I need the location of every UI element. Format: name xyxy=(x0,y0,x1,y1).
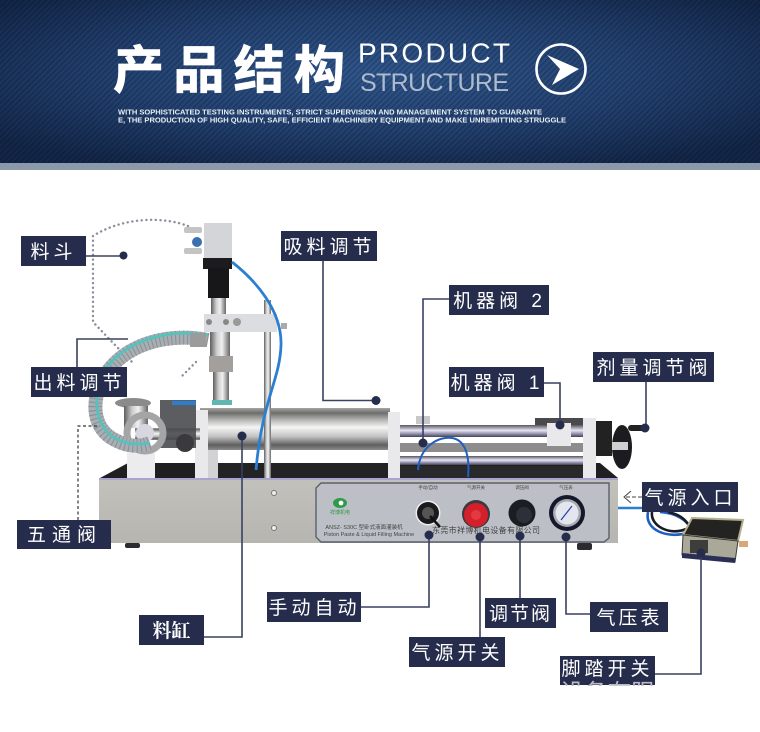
label: 五通阀 xyxy=(17,520,111,549)
label: 料斗: 料斗 xyxy=(30,241,77,263)
hand wheel xyxy=(596,421,648,469)
leader: hopper xyxy=(86,252,128,260)
front block xyxy=(127,453,155,478)
blue loop xyxy=(418,438,468,477)
regulator knob xyxy=(508,500,536,526)
stainless base xyxy=(99,478,618,543)
title: STRUCTURE: STRUCTURE xyxy=(360,69,509,97)
label: 气源入口 xyxy=(642,482,738,512)
blue air tube xyxy=(232,262,281,470)
leader: machine valve 2 xyxy=(418,299,449,448)
knob captions: 调压阀 xyxy=(515,484,529,491)
machine xyxy=(95,223,648,550)
upright blocks xyxy=(195,410,596,478)
knob captions xyxy=(418,484,573,491)
header banner xyxy=(0,0,760,170)
leader: air switch xyxy=(476,532,484,637)
leader: machine valve 1 xyxy=(544,383,564,430)
label: 机器阀 1 xyxy=(449,367,544,397)
label: 手动自动 xyxy=(267,592,361,622)
leader: regulator xyxy=(516,532,524,598)
pressure gauge xyxy=(549,495,585,531)
label: 出料调节: 出料调节 xyxy=(33,372,126,394)
label: 剂量调节阀: 剂量调节阀 xyxy=(596,357,712,379)
label: 气压表: 气压表 xyxy=(596,607,663,629)
black deck xyxy=(100,463,618,478)
tagline xyxy=(118,108,566,124)
logo: 祥博机电 xyxy=(330,509,350,516)
leader: suction adjust xyxy=(323,261,380,405)
control panel xyxy=(316,483,609,542)
main cylinder xyxy=(200,408,390,450)
air hose to base xyxy=(618,507,642,509)
leader: material cylinder xyxy=(204,432,246,637)
leader: five-way valve xyxy=(78,426,97,520)
label: 出料调节 xyxy=(31,367,127,397)
title: Chinese: 产品结构 xyxy=(113,42,345,99)
coiled cables xyxy=(648,512,690,535)
tagline: E, THE PRODUCTION OF HIGH QUALITY, SAFE, EFFICIENT MACHINERY EQUIPMENT AND MAKE UNREMITTING STRUGGLE xyxy=(118,116,566,124)
leader: dose valve xyxy=(640,382,650,432)
leader: discharge adjust xyxy=(77,339,128,367)
label: 气源开关 xyxy=(409,637,505,667)
label: 气源开关: 气源开关 xyxy=(411,642,504,664)
pole xyxy=(264,300,271,478)
logo xyxy=(330,498,350,516)
emergency button xyxy=(462,500,490,528)
label: 机器阀 2: 机器阀 2 xyxy=(453,290,546,312)
arrow: air inlet xyxy=(624,491,642,503)
label: 机器阀 2 xyxy=(449,285,549,315)
vertical cylinder assembly xyxy=(184,223,287,405)
label: 手动自动: 手动自动 xyxy=(268,597,361,619)
leader: manual auto xyxy=(361,530,434,607)
label: 脚踏开关: 脚踏开关 xyxy=(561,658,654,680)
leader: gauge xyxy=(562,532,590,614)
machine valve fitting xyxy=(416,416,430,424)
five-way valve xyxy=(115,398,200,452)
label: 机器阀 1: 机器阀 1 xyxy=(451,372,543,394)
company text: 东莞市祥博机电设备有限公司 xyxy=(432,525,540,535)
title: PRODUCT: PRODUCT xyxy=(358,38,510,68)
knob captions: 气源开关 xyxy=(467,484,485,491)
material hose xyxy=(95,333,208,446)
lower rods behind xyxy=(207,418,590,478)
label: 调节阀 xyxy=(485,598,556,628)
label: 料缸: 料缸 xyxy=(152,620,191,642)
knob captions: 气压表 xyxy=(559,484,573,491)
label: 调节阀: 调节阀 xyxy=(489,603,552,625)
label: 气压表 xyxy=(590,602,668,632)
label: 剂量调节阀 xyxy=(593,352,714,382)
air fittings xyxy=(184,227,202,254)
foot switch xyxy=(648,512,748,563)
clipped ghost text: 设备有限 xyxy=(560,680,655,707)
knob captions: 手动/自动 xyxy=(418,484,438,491)
feet xyxy=(125,543,592,550)
label: 料缸 xyxy=(139,615,204,645)
icon: arrow in circle xyxy=(536,44,586,94)
model text: ANSZ- S30C 型卧式液面灌装机 xyxy=(325,523,403,531)
tagline: WITH SOPHISTICATED TESTING INSTRUMENTS, STRICT SUPERVISION AND MANAGEMENT SYSTEM TO GUARANTE xyxy=(118,108,542,116)
hopper dotted outline xyxy=(93,220,196,376)
label: 吸料调节 xyxy=(281,231,377,261)
label: 五通阀: 五通阀 xyxy=(27,524,102,546)
key switch xyxy=(416,500,440,527)
label: 吸料调节: 吸料调节 xyxy=(283,236,376,258)
control panel: Piston Paste & Liquid Filling Machine xyxy=(324,532,414,538)
label: 气源入口: 气源入口 xyxy=(644,487,737,509)
leader: foot switch xyxy=(655,548,706,674)
label: 料斗 xyxy=(21,236,86,266)
